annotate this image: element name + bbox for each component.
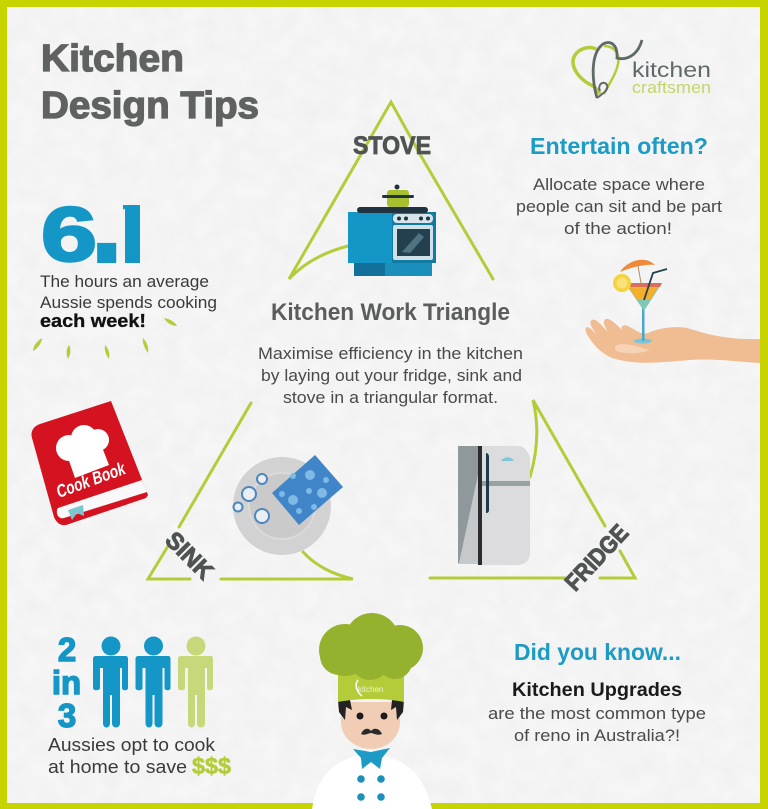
fridge triangle [430, 400, 635, 578]
logo: kitchen craftsmen: kitchen [632, 59, 711, 82]
title [41, 38, 259, 127]
stove triangle [289, 102, 493, 279]
stat: 6.1 hours [43, 205, 140, 263]
callout: entertain often: Allocate space where [533, 175, 705, 194]
text: triangle description: by laying out your fridge, sink and [261, 366, 522, 385]
callout: did you know [488, 639, 706, 745]
text: triangle description: stove in a triangular format. [283, 388, 498, 407]
callout: did you know: Did you know... [514, 639, 681, 665]
stat: 2 in 3: in [52, 664, 81, 701]
callout: did you know: are the most common type [488, 704, 706, 723]
text: aussies opt to cook [48, 735, 231, 779]
stat: 6.1 hours: 6 [41, 192, 97, 278]
label: fridge: FRIDGE [560, 520, 634, 596]
callout: entertain often: Entertain often? [530, 133, 708, 159]
sink triangle [148, 403, 353, 579]
icon: chef: kitchen [358, 685, 383, 694]
icon: cook book: Cook Book [54, 458, 129, 502]
stat: 6.1 hours: . [88, 141, 126, 292]
logo: kitchen craftsmen [573, 40, 711, 98]
text: aussies opt to cook: $$$ [192, 753, 231, 779]
text: hours an average aussie spends cooking: each week! [40, 311, 146, 331]
text: aussies opt to cook: at home to save [48, 757, 187, 777]
title: Design Tips [41, 85, 259, 127]
stat: 2 in 3: 2 [58, 631, 76, 668]
stat: 6.1 hours: 1 [97, 169, 164, 303]
callout: did you know: Kitchen Upgrades [512, 680, 682, 701]
label: sink: SINK [160, 527, 219, 586]
icon: plate and sponge [233, 455, 343, 555]
stat: 2 in 3: 3 [58, 697, 76, 734]
title: Kitchen [41, 38, 184, 80]
callout: entertain often [516, 133, 722, 238]
text: hours an average aussie spends cooking: Aussie spends cooking [40, 293, 217, 312]
stat: 2 in 3 [52, 631, 81, 734]
icon: hand holding cocktail [586, 260, 760, 363]
text: triangle description [258, 344, 523, 407]
text: hours an average aussie spends cooking: The hours an average [40, 272, 209, 291]
heading: kitchen work triangle: Kitchen Work Triangle [271, 299, 510, 326]
sparkle dashes [33, 318, 177, 359]
icon: cook book [31, 401, 148, 525]
icon: stove [348, 184, 436, 276]
icon: fridge [458, 446, 530, 565]
label: stove: STOVE [353, 132, 431, 160]
callout: did you know: of reno in Australia?! [514, 726, 680, 745]
text: hours an average aussie spends cooking [40, 272, 217, 331]
text: triangle description: Maximise efficiency in the kitchen [258, 344, 523, 363]
icon: chef [312, 613, 432, 809]
pictogram: people [93, 636, 213, 728]
callout: entertain often: people can sit and be part [516, 197, 722, 216]
logo: kitchen craftsmen: craftsmen [632, 78, 711, 97]
callout: entertain often: of the action! [564, 219, 672, 238]
text: aussies opt to cook: Aussies opt to cook [48, 735, 216, 755]
